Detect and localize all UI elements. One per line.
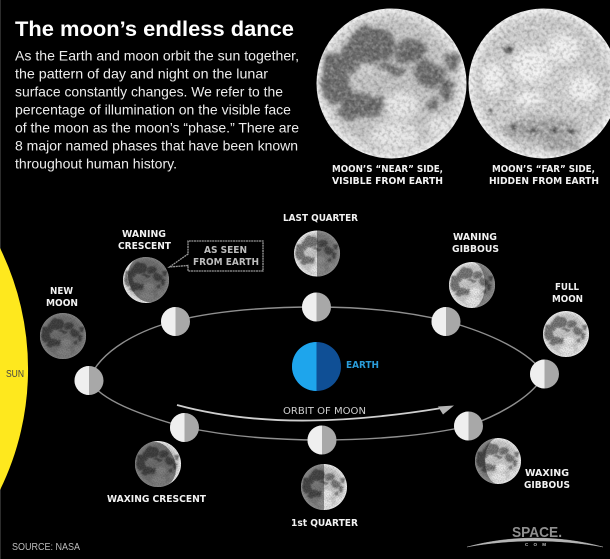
label: waning crescent: WANING xyxy=(122,229,166,240)
far side caption: MOON’S “FAR” SIDE, xyxy=(492,164,595,175)
orbit path xyxy=(89,307,544,440)
intro text: As the Earth and moon orbit the sun together, xyxy=(15,48,299,64)
earth label: EARTH xyxy=(346,360,379,371)
first quarter moon xyxy=(301,464,347,510)
callout: as seen from earth xyxy=(170,241,263,271)
callout: as seen from earth: AS SEEN xyxy=(204,245,247,256)
logo: space.com: COM xyxy=(525,542,546,547)
title: The moon’s endless dance xyxy=(15,18,294,41)
intro text: of the moon as the moon’s “phase.” There are xyxy=(15,120,299,136)
label: waning gibbous: WANING xyxy=(453,232,497,243)
label: full moon: FULL xyxy=(555,282,579,293)
label: full moon xyxy=(552,282,583,305)
full moon xyxy=(543,311,589,357)
last quarter moon xyxy=(294,230,340,277)
intro text: throughout human history. xyxy=(15,156,177,172)
intro text xyxy=(15,48,299,172)
label: waning crescent xyxy=(118,229,171,252)
label: waning crescent: CRESCENT xyxy=(118,241,171,252)
source: SOURCE: NASA xyxy=(12,542,80,553)
label: waxing gibbous xyxy=(524,468,570,491)
waning gibbous moon xyxy=(449,262,495,308)
sun xyxy=(0,248,28,490)
intro text: surface constantly changes. We refer to the xyxy=(15,84,283,100)
label: new moon: NEW xyxy=(50,286,73,297)
orbit phase markers xyxy=(74,292,559,454)
intro text: 8 major named phases that have been known xyxy=(15,138,298,154)
far side caption xyxy=(489,164,599,187)
near side caption: VISIBLE FROM EARTH xyxy=(332,176,443,187)
far side caption: HIDDEN FROM EARTH xyxy=(489,176,599,187)
earth xyxy=(292,342,379,391)
waxing gibbous moon xyxy=(475,438,521,484)
logo: space.com xyxy=(467,524,603,547)
near side caption: MOON’S “NEAR” SIDE, xyxy=(332,164,443,175)
sun label: SUN xyxy=(6,369,24,380)
label: full moon: MOON xyxy=(552,294,583,305)
orbit direction arrow xyxy=(177,405,454,421)
near side moon xyxy=(316,8,466,158)
label: new moon xyxy=(46,286,78,309)
intro text: the pattern of day and night on the lunar xyxy=(15,66,268,82)
waning crescent moon xyxy=(122,250,176,308)
waxing crescent moon xyxy=(128,436,182,494)
label: first quarter: 1st QUARTER xyxy=(291,518,359,529)
intro text: percentage of illumination on the visible face xyxy=(15,102,291,118)
new moon xyxy=(40,313,86,359)
label: waxing gibbous: GIBBOUS xyxy=(524,480,570,491)
orbit label: ORBIT OF MOON xyxy=(283,406,366,417)
logo: space.com: SPACE. xyxy=(512,524,562,541)
callout: as seen from earth: FROM EARTH xyxy=(193,257,259,268)
label: waxing crescent: WAXING CRESCENT xyxy=(107,494,206,505)
label: waning gibbous: GIBBOUS xyxy=(452,244,499,255)
label: waxing gibbous: WAXING xyxy=(525,468,569,479)
near side caption xyxy=(332,164,443,187)
label: new moon: MOON xyxy=(46,298,78,309)
label: last quarter: LAST QUARTER xyxy=(283,213,359,224)
label: waning gibbous xyxy=(452,232,499,255)
far side moon xyxy=(468,8,610,158)
